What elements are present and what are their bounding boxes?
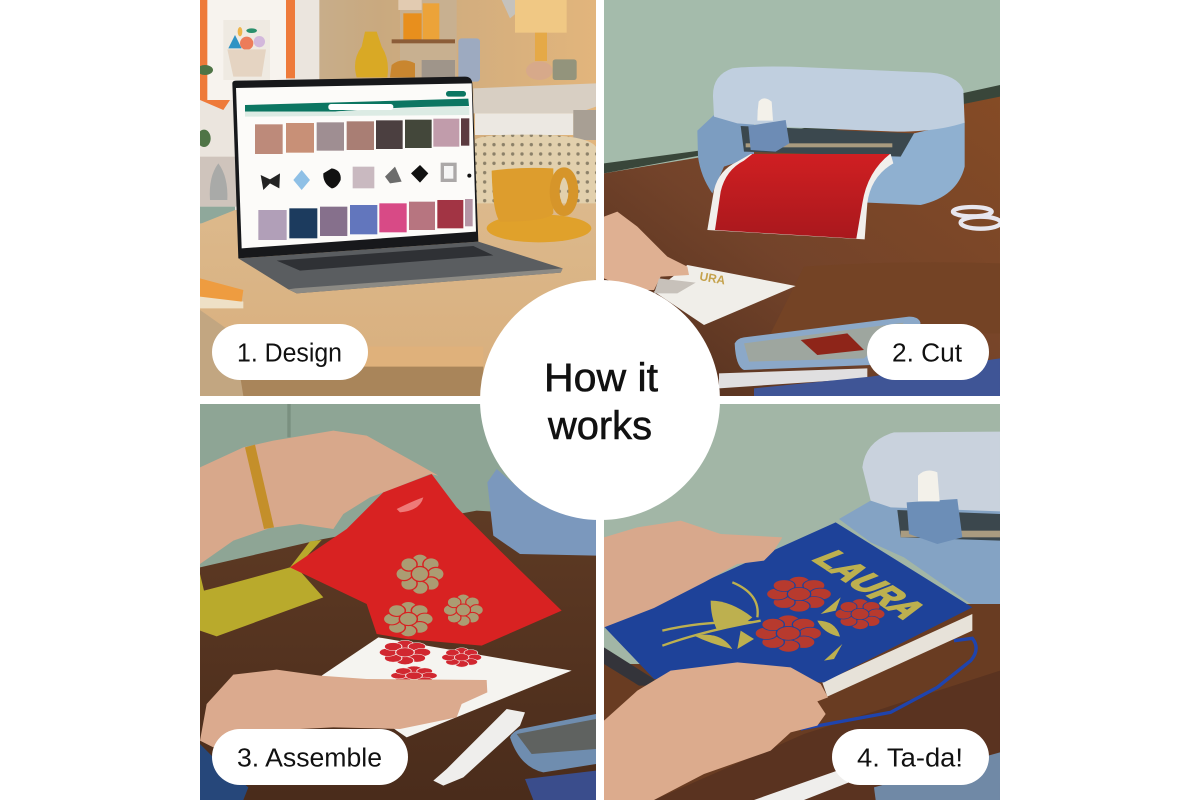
cutting machine (487, 469, 596, 556)
label: 1. Design: 1. Design (237, 340, 342, 368)
circle-shadowed sheet corner (654, 278, 696, 293)
side table glass (200, 157, 237, 223)
cutting machine (697, 67, 965, 239)
orange notebook (200, 278, 243, 308)
label: 3. Assemble: 3. Assemble (237, 744, 382, 772)
center circle title: How it (544, 356, 658, 400)
panel: 2. Cut (604, 0, 1001, 396)
shelf objects (390, 0, 480, 82)
yellow packaging (200, 540, 323, 636)
white pen (719, 368, 867, 388)
panel: 1. Design (197, 0, 596, 396)
kitchen counter (473, 83, 596, 140)
framed wall art (200, 0, 295, 110)
bowls (526, 59, 577, 80)
paper sheet: URA (698, 269, 727, 288)
project thumbnails (258, 199, 473, 240)
scissors (953, 207, 1001, 229)
ribbon (801, 638, 976, 729)
bookmark thumbnails (255, 118, 469, 154)
label: 2. Cut: 2. Cut (892, 340, 962, 368)
blue notebook (525, 771, 596, 800)
label: 1. Design (212, 324, 368, 380)
cutting carriage (748, 98, 789, 152)
plant (200, 65, 213, 147)
table lamp (515, 0, 567, 61)
label: 2. Cut (867, 324, 989, 380)
red floral print on paper (380, 640, 482, 680)
label: 4. Ta-da!: 4. Ta-da! (857, 744, 963, 772)
gold flowers on vinyl (383, 554, 483, 637)
table top (200, 204, 596, 346)
label: 4. Ta-da! (832, 729, 989, 785)
center circle title (480, 280, 720, 520)
upper hand (604, 521, 782, 627)
laptop (232, 77, 563, 293)
notebook title: LAURA (803, 546, 936, 623)
notebook (604, 522, 972, 697)
panel: 3. Assemble (200, 404, 596, 800)
white pen (754, 771, 849, 800)
lower hand (200, 670, 487, 747)
floral design (662, 576, 885, 661)
phone (510, 714, 596, 772)
phone (874, 752, 1000, 800)
yellow vase (355, 32, 388, 77)
center circle title: works (547, 404, 652, 448)
paper sheet (654, 265, 796, 325)
lower hand (604, 662, 828, 800)
image thumbnails (261, 163, 471, 190)
panel: 4. Ta-da! (604, 404, 1000, 800)
blue sleeve (200, 744, 248, 800)
metal lamp arm (502, 0, 515, 18)
phone (735, 317, 921, 370)
mug on saucer (487, 168, 591, 242)
label: 3. Assemble (212, 729, 408, 785)
rattan chair (475, 135, 596, 208)
gold bracelet (245, 445, 274, 529)
upper hand and arm (200, 431, 438, 564)
hand (604, 212, 689, 290)
red vinyl sheet (707, 154, 893, 239)
cutting machine (839, 432, 1000, 604)
white pen (433, 709, 525, 786)
red vinyl sheet (290, 474, 562, 646)
blue notebook (754, 358, 1000, 396)
white paper (322, 637, 572, 737)
